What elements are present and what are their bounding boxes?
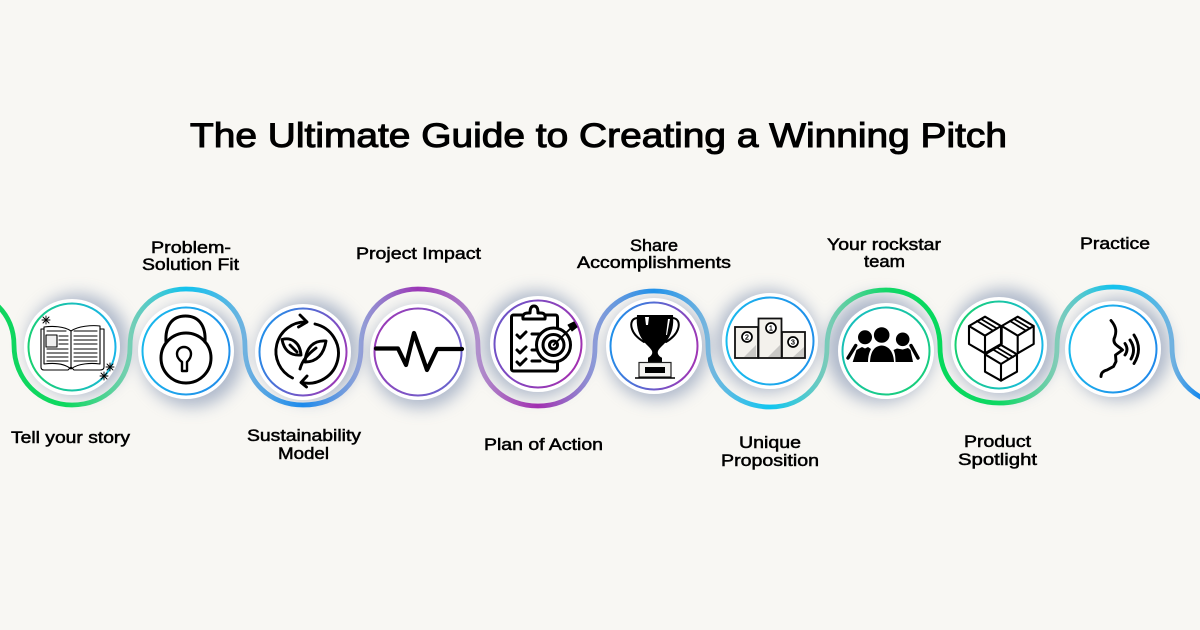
label: Your rockstar [827,236,942,254]
step 3: Sustainability Model [247,304,362,463]
badge circle [606,298,702,394]
label: Sustainability [247,427,362,445]
badge circle [722,293,818,389]
icon: open book [41,316,114,380]
badge circle [1065,301,1161,397]
step 9: Product Spotlight [951,297,1047,469]
step 5: Plan of Action [484,296,603,454]
icon: winners podium: 1 [769,326,773,332]
label: Accomplishments [577,254,731,272]
icon: stacked boxes [969,317,1034,381]
label: Solution Fit [142,256,240,274]
icon: speaking face [1101,320,1138,376]
title: The Ultimate Guide to Creating a Winning Pitch [190,117,1007,155]
label: Unique [739,434,801,452]
icon: winners podium: 2 [745,334,749,342]
icon: trophy [631,315,679,378]
badge circle [490,296,586,392]
label: Project Impact [356,245,482,263]
label [721,434,819,470]
icon: clipboard with target [512,306,577,371]
badge circle [838,303,934,399]
step 1: Tell your story [11,299,131,447]
label [827,236,942,271]
badge circle [138,303,234,399]
step 4: Project Impact [356,245,482,400]
label: Share [630,237,678,255]
label: Spotlight [958,451,1038,469]
step 10: Practice [1065,235,1161,397]
icon: winners podium: 3 [791,340,795,346]
label [577,237,731,272]
ribbon wave connecting the steps [0,287,1200,407]
step 2: Problem-Solution Fit [138,239,240,399]
icon: recycling arrows with leaves [276,315,338,387]
badge circle [370,304,466,400]
label: Product [964,433,1032,451]
label [958,433,1038,469]
label: Practice [1080,235,1150,253]
badge circle [24,299,120,395]
label [142,239,240,274]
icon: winners podium [735,318,805,358]
step 8: Your rockstar team [827,236,942,399]
label: Plan of Action [484,436,603,454]
icon: padlock [161,316,211,383]
label: Tell your story [11,429,131,447]
label [247,427,362,463]
badge circle [255,304,351,400]
label: Model [278,445,329,463]
badge circle [951,297,1047,393]
icon: team of people [848,327,918,362]
icon: heartbeat line [376,333,462,370]
step 6: Share Accomplishments [577,237,731,394]
label: Problem- [151,239,231,257]
label: team [864,253,905,271]
label: Proposition [721,452,819,470]
step 7: Unique Proposition [721,293,819,470]
